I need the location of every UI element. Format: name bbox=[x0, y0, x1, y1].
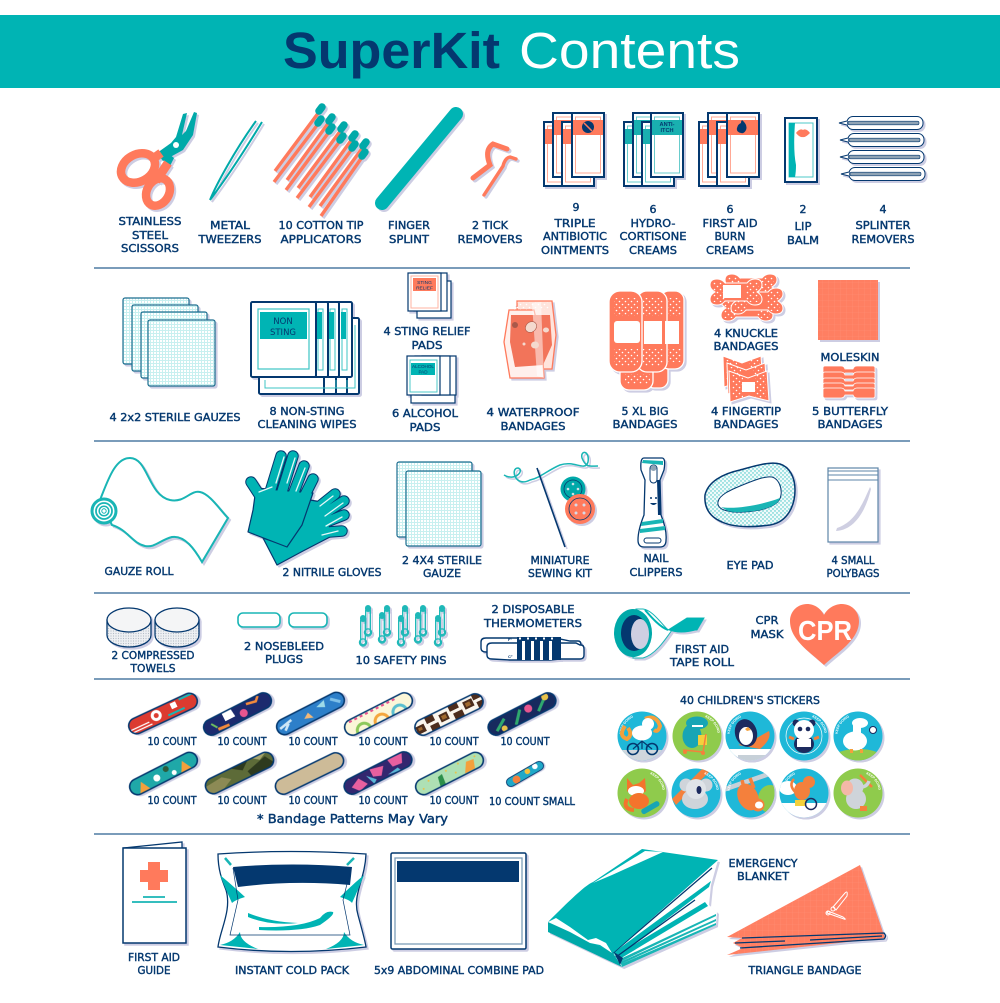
sticker: fox bbox=[618, 768, 668, 820]
label bbox=[852, 204, 915, 246]
item: hydrocortisone creams bbox=[620, 113, 687, 257]
sticker: fox: KEEP GOING bbox=[650, 772, 665, 790]
item: gauze roll bbox=[92, 458, 228, 578]
label bbox=[702, 204, 758, 257]
item: nitrile gloves bbox=[248, 456, 382, 579]
label: 2 NOSEBLEED bbox=[244, 641, 324, 653]
item: lip balm bbox=[785, 118, 819, 247]
label: BLANKET bbox=[737, 871, 790, 883]
label: GAUZE bbox=[423, 568, 461, 580]
sticker: penguin: KEEP GOING bbox=[727, 716, 741, 734]
label bbox=[541, 202, 609, 257]
count labels: 10 COUNT bbox=[430, 795, 479, 807]
label bbox=[669, 644, 734, 669]
icon: cotton tips bbox=[274, 107, 366, 216]
panel: children's stickers bbox=[618, 695, 884, 820]
sticker: panda bbox=[780, 712, 830, 762]
icon: tape roll bbox=[614, 609, 704, 658]
icon: gauze stack bbox=[123, 298, 215, 386]
bandage: camouflage bbox=[204, 751, 278, 796]
label: THERMOMETERS bbox=[483, 618, 582, 630]
item: triangle bandage bbox=[727, 865, 886, 977]
item: emergency blanket bbox=[548, 849, 798, 967]
label: STAINLESS bbox=[118, 216, 182, 228]
label bbox=[278, 220, 364, 246]
label bbox=[384, 326, 470, 352]
item: cpr mask bbox=[750, 604, 859, 665]
item: triple antibiotic ointments bbox=[541, 113, 609, 257]
label bbox=[528, 555, 593, 580]
icon: tweezers bbox=[210, 121, 262, 200]
icon: thermometers: F° bbox=[508, 637, 512, 642]
icon: triangle bandage bbox=[727, 865, 886, 955]
icon: alcohol pads: PAD bbox=[418, 370, 428, 374]
label: BURN bbox=[714, 231, 746, 243]
icon: eye pad bbox=[705, 463, 795, 527]
label: GUIDE bbox=[138, 965, 171, 977]
icon: thread and needle bbox=[504, 452, 598, 547]
label bbox=[402, 555, 482, 580]
label: BANDAGES bbox=[500, 421, 566, 433]
bandage: dark jungle bbox=[487, 692, 560, 737]
item: waterproof bandages bbox=[486, 301, 580, 433]
item: finger splint bbox=[382, 114, 456, 246]
item: splinter removers bbox=[839, 116, 925, 246]
icon: cream packets: ANTI- bbox=[660, 122, 675, 128]
label: CORTISONE bbox=[620, 231, 687, 243]
sticker: penguin bbox=[726, 712, 776, 762]
icon: thermometers: C° bbox=[508, 654, 513, 659]
item: non-sting cleaning wipes bbox=[251, 302, 359, 431]
item: instant cold pack bbox=[218, 852, 366, 977]
label: 2 bbox=[800, 204, 806, 216]
bandage: red bbox=[128, 692, 201, 736]
label bbox=[392, 408, 458, 434]
label: 6 bbox=[650, 204, 657, 216]
item: tweezers bbox=[197, 121, 262, 246]
icon: sting relief pads: STING bbox=[417, 280, 432, 286]
label: 2 DISPOSABLE bbox=[492, 604, 575, 616]
title: SuperKit bbox=[283, 22, 500, 79]
note: * Bandage Patterns May Vary bbox=[257, 812, 448, 826]
item: abdominal combine pad bbox=[374, 853, 544, 977]
back glove bbox=[263, 494, 344, 565]
sticker: unicorn: KEEP GOING bbox=[619, 716, 633, 734]
icon: gauze roll bbox=[92, 458, 228, 562]
label: 5 XL BIG bbox=[622, 406, 668, 418]
item: alcohol pads bbox=[392, 356, 458, 434]
item: xl big bandages bbox=[609, 291, 684, 431]
icon: wipes stack bbox=[251, 302, 359, 394]
label bbox=[128, 952, 180, 977]
label: MINIATURE bbox=[530, 555, 590, 567]
icon: lip balm packet bbox=[785, 118, 817, 182]
item: sting relief pads bbox=[384, 273, 470, 352]
icon: polybag bbox=[828, 468, 878, 542]
icon: combine pad bbox=[391, 853, 526, 949]
label: FIRST AID bbox=[675, 644, 729, 656]
label: 4 SMALL bbox=[832, 555, 875, 567]
label: TWEEZERS bbox=[197, 234, 262, 246]
item: butterfly bandages bbox=[812, 366, 889, 431]
icon: towels bbox=[107, 608, 199, 647]
icon: alcohol pads: ALCOHOL bbox=[412, 364, 434, 369]
icon: splinter removers bbox=[839, 116, 925, 180]
label bbox=[620, 204, 687, 257]
label: 4 WATERPROOF bbox=[486, 407, 580, 419]
item: scissors bbox=[116, 112, 197, 255]
label: BANDAGES bbox=[714, 341, 779, 353]
item: disposable thermometers bbox=[481, 604, 584, 660]
label bbox=[258, 406, 357, 431]
sticker: llama bbox=[834, 712, 884, 762]
label: CLIPPERS bbox=[630, 567, 683, 579]
title second word: Contents bbox=[519, 22, 740, 79]
count labels: 10 COUNT bbox=[288, 736, 338, 748]
count labels: 10 COUNT bbox=[148, 795, 197, 807]
bandage: purple pink bbox=[343, 750, 416, 796]
label: METAL bbox=[210, 220, 250, 232]
label: CPR bbox=[756, 615, 779, 627]
label: 2 COMPRESSED bbox=[112, 650, 194, 662]
icon: butterfly bandages bbox=[823, 366, 875, 398]
label: INSTANT COLD PACK bbox=[235, 965, 350, 977]
label: 10 COTTON TIP bbox=[278, 220, 364, 232]
label: TAPE ROLL bbox=[669, 657, 734, 669]
label: PADS bbox=[410, 422, 441, 434]
sticker: dinosaur: KEEP GOING bbox=[705, 715, 720, 733]
label bbox=[714, 328, 779, 353]
label bbox=[826, 555, 880, 580]
icon: 4x4 gauze bbox=[397, 462, 481, 546]
sticker: elephant: KEEP GOING bbox=[866, 772, 881, 790]
label: REMOVERS bbox=[852, 234, 915, 246]
icon: nail clippers bbox=[638, 458, 666, 547]
item: safety pins bbox=[356, 605, 447, 667]
label bbox=[486, 407, 580, 433]
label: 6 ALCOHOL bbox=[392, 408, 458, 420]
label: ANTIBIOTIC bbox=[543, 231, 607, 243]
label: BANDAGES bbox=[714, 419, 779, 431]
label: 10 SAFETY PINS bbox=[356, 655, 447, 667]
sticker: sloth bbox=[726, 768, 776, 820]
icon: scissors bbox=[116, 112, 197, 210]
label: FINGER bbox=[388, 220, 431, 232]
label bbox=[244, 641, 324, 666]
label bbox=[812, 406, 889, 431]
item: 2x2 sterile gauzes bbox=[110, 298, 241, 424]
label: OINTMENTS bbox=[541, 245, 609, 257]
label: CREAMS bbox=[706, 245, 754, 257]
bandage: leopard bbox=[414, 692, 487, 738]
label: SPLINTER bbox=[856, 220, 911, 232]
label bbox=[197, 220, 262, 246]
label: POLYBAGS bbox=[826, 568, 880, 580]
sticker: koala: KEEP GOING bbox=[704, 772, 719, 790]
bandage: teal camping bbox=[128, 751, 201, 796]
count labels bbox=[148, 736, 575, 808]
icon: plugs bbox=[238, 613, 327, 627]
label: 2 NITRILE GLOVES bbox=[282, 567, 382, 579]
icon: tick removers bbox=[473, 144, 516, 195]
count labels: 10 COUNT bbox=[148, 736, 197, 748]
title banner bbox=[0, 15, 1000, 88]
label bbox=[711, 406, 782, 431]
label: FIRST AID bbox=[128, 952, 180, 964]
label bbox=[118, 216, 182, 255]
icon: alcohol pads bbox=[407, 356, 456, 403]
sticker: llama: KEEP GOING bbox=[835, 716, 849, 734]
label: FIRST AID bbox=[702, 218, 758, 230]
label: CREAMS bbox=[629, 245, 677, 257]
label: BANDAGES bbox=[612, 419, 678, 431]
front glove bbox=[248, 456, 313, 547]
sticker: unicorn bbox=[618, 712, 668, 762]
bandage: navy floral bbox=[202, 692, 275, 737]
label: PADS bbox=[412, 340, 443, 352]
sticker: panda: KEEP GOING bbox=[812, 715, 827, 733]
icon: waterproof bandages bbox=[504, 301, 556, 378]
sticker: koala bbox=[672, 768, 722, 820]
label: 4 FINGERTIP bbox=[711, 406, 782, 418]
label bbox=[483, 604, 582, 630]
label: 6 bbox=[726, 204, 734, 216]
item: compressed towels bbox=[107, 608, 199, 675]
item: 4x4 sterile gauze bbox=[397, 462, 482, 580]
label: HYDRO- bbox=[630, 218, 676, 230]
label: 4 STING RELIEF bbox=[384, 326, 470, 338]
sticker: sloth: KEEP GOING bbox=[727, 772, 741, 791]
icon: sting relief pads: RELIEF bbox=[416, 286, 433, 292]
label: SEWING KIT bbox=[528, 568, 593, 580]
label bbox=[388, 220, 431, 246]
item: moleskin bbox=[818, 280, 880, 364]
label: BALM bbox=[787, 235, 819, 247]
label bbox=[112, 650, 194, 675]
item: knuckle bandages bbox=[710, 274, 783, 353]
item: first aid burn creams bbox=[699, 113, 759, 257]
label: CLEANING WIPES bbox=[258, 419, 357, 431]
icon: cream packets bbox=[624, 113, 683, 186]
label bbox=[750, 615, 785, 641]
item: nosebleed plugs bbox=[238, 613, 327, 666]
label: MASK bbox=[750, 629, 785, 641]
icon: xl bandages bbox=[609, 291, 684, 390]
label: NAIL bbox=[644, 553, 669, 565]
label: PLUGS bbox=[265, 654, 303, 666]
label bbox=[612, 406, 678, 431]
icon: knuckle bandages bbox=[710, 274, 783, 321]
icon: gloves bbox=[248, 456, 344, 565]
icon: cream packets: ITCH bbox=[660, 128, 674, 134]
label: STEEL bbox=[132, 230, 168, 242]
panel: bandage patterns bbox=[125, 688, 575, 826]
count labels: 10 COUNT bbox=[358, 795, 408, 807]
label: TOWELS bbox=[129, 663, 176, 675]
label: 2 TICK bbox=[472, 220, 509, 232]
item: nail clippers bbox=[630, 458, 683, 579]
heading: 40 CHILDREN'S STICKERS bbox=[680, 695, 820, 707]
item: first aid tape roll bbox=[614, 609, 734, 669]
label: EYE PAD bbox=[726, 560, 774, 572]
icon: ointment packets bbox=[544, 113, 604, 186]
count labels: 10 COUNT bbox=[358, 736, 408, 748]
item: miniature sewing kit bbox=[504, 452, 598, 580]
item: small polybags bbox=[826, 468, 880, 580]
icon: wipes stack: NON bbox=[273, 317, 293, 327]
count labels: 10 COUNT SMALL bbox=[489, 796, 575, 808]
item: first aid guide bbox=[123, 842, 186, 977]
bandage: rainbow bbox=[344, 692, 416, 737]
icon: wipes stack: STING bbox=[270, 328, 296, 338]
label: LIP bbox=[794, 221, 812, 233]
label: MOLESKIN bbox=[820, 352, 880, 364]
icon: thermometers bbox=[481, 637, 584, 660]
label: 4 bbox=[880, 204, 887, 216]
count labels: 10 COUNT bbox=[288, 795, 338, 807]
label: GAUZE ROLL bbox=[104, 566, 174, 578]
label: SCISSORS bbox=[121, 243, 179, 255]
bandage: small teal bbox=[506, 760, 546, 788]
label: 5 BUTTERFLY bbox=[812, 406, 889, 418]
label: APPLICATORS bbox=[280, 234, 362, 246]
sticker: dinosaur bbox=[672, 712, 724, 762]
label: SPLINT bbox=[389, 234, 430, 246]
count labels: 10 COUNT bbox=[500, 736, 550, 748]
icon: sting relief pads bbox=[408, 273, 451, 318]
label: 9 bbox=[572, 202, 580, 214]
label: BANDAGES bbox=[818, 419, 883, 431]
label: 4 2x2 STERILE GAUZES bbox=[110, 412, 241, 424]
item: eye pad bbox=[705, 463, 795, 572]
label bbox=[630, 553, 683, 579]
item: cotton tip applicators bbox=[274, 107, 366, 246]
count labels: 10 COUNT bbox=[218, 795, 267, 807]
bandage: blue bbox=[276, 691, 348, 736]
label bbox=[458, 220, 523, 246]
item: fingertip bandages bbox=[711, 356, 782, 431]
label: 2 4X4 STERILE bbox=[402, 555, 482, 567]
label: REMOVERS bbox=[458, 234, 523, 246]
icon: burn cream packets bbox=[699, 113, 759, 186]
icon: guide booklet bbox=[123, 842, 186, 943]
bandage: tan bbox=[273, 750, 346, 797]
label bbox=[787, 204, 819, 247]
label: 4 KNUCKLE bbox=[714, 328, 778, 340]
bandage: light green bbox=[414, 751, 487, 796]
count labels: 10 COUNT bbox=[430, 736, 479, 748]
count labels: 10 COUNT bbox=[218, 736, 267, 748]
icon: folded blanket bbox=[548, 849, 718, 967]
sticker: monkey: KEEP GOING bbox=[784, 772, 795, 782]
label: 5x9 ABDOMINAL COMBINE PAD bbox=[374, 965, 544, 977]
label: TRIANGLE BANDAGE bbox=[747, 965, 862, 977]
icon: moleskin bbox=[818, 280, 878, 340]
icon: cold pack bbox=[218, 852, 366, 952]
icon: fingertip bandages bbox=[723, 356, 769, 402]
icon: safety pins bbox=[359, 605, 446, 646]
sticker: monkey bbox=[780, 768, 830, 820]
label: TRIPLE bbox=[553, 218, 596, 230]
label: 8 NON-STING bbox=[270, 406, 344, 418]
label: EMERGENCY bbox=[728, 858, 798, 870]
icon: heart: CPR bbox=[798, 615, 852, 646]
label bbox=[728, 858, 798, 883]
item: tick removers bbox=[458, 144, 523, 246]
sticker: elephant bbox=[834, 768, 884, 820]
icon: finger splint bbox=[382, 114, 456, 203]
